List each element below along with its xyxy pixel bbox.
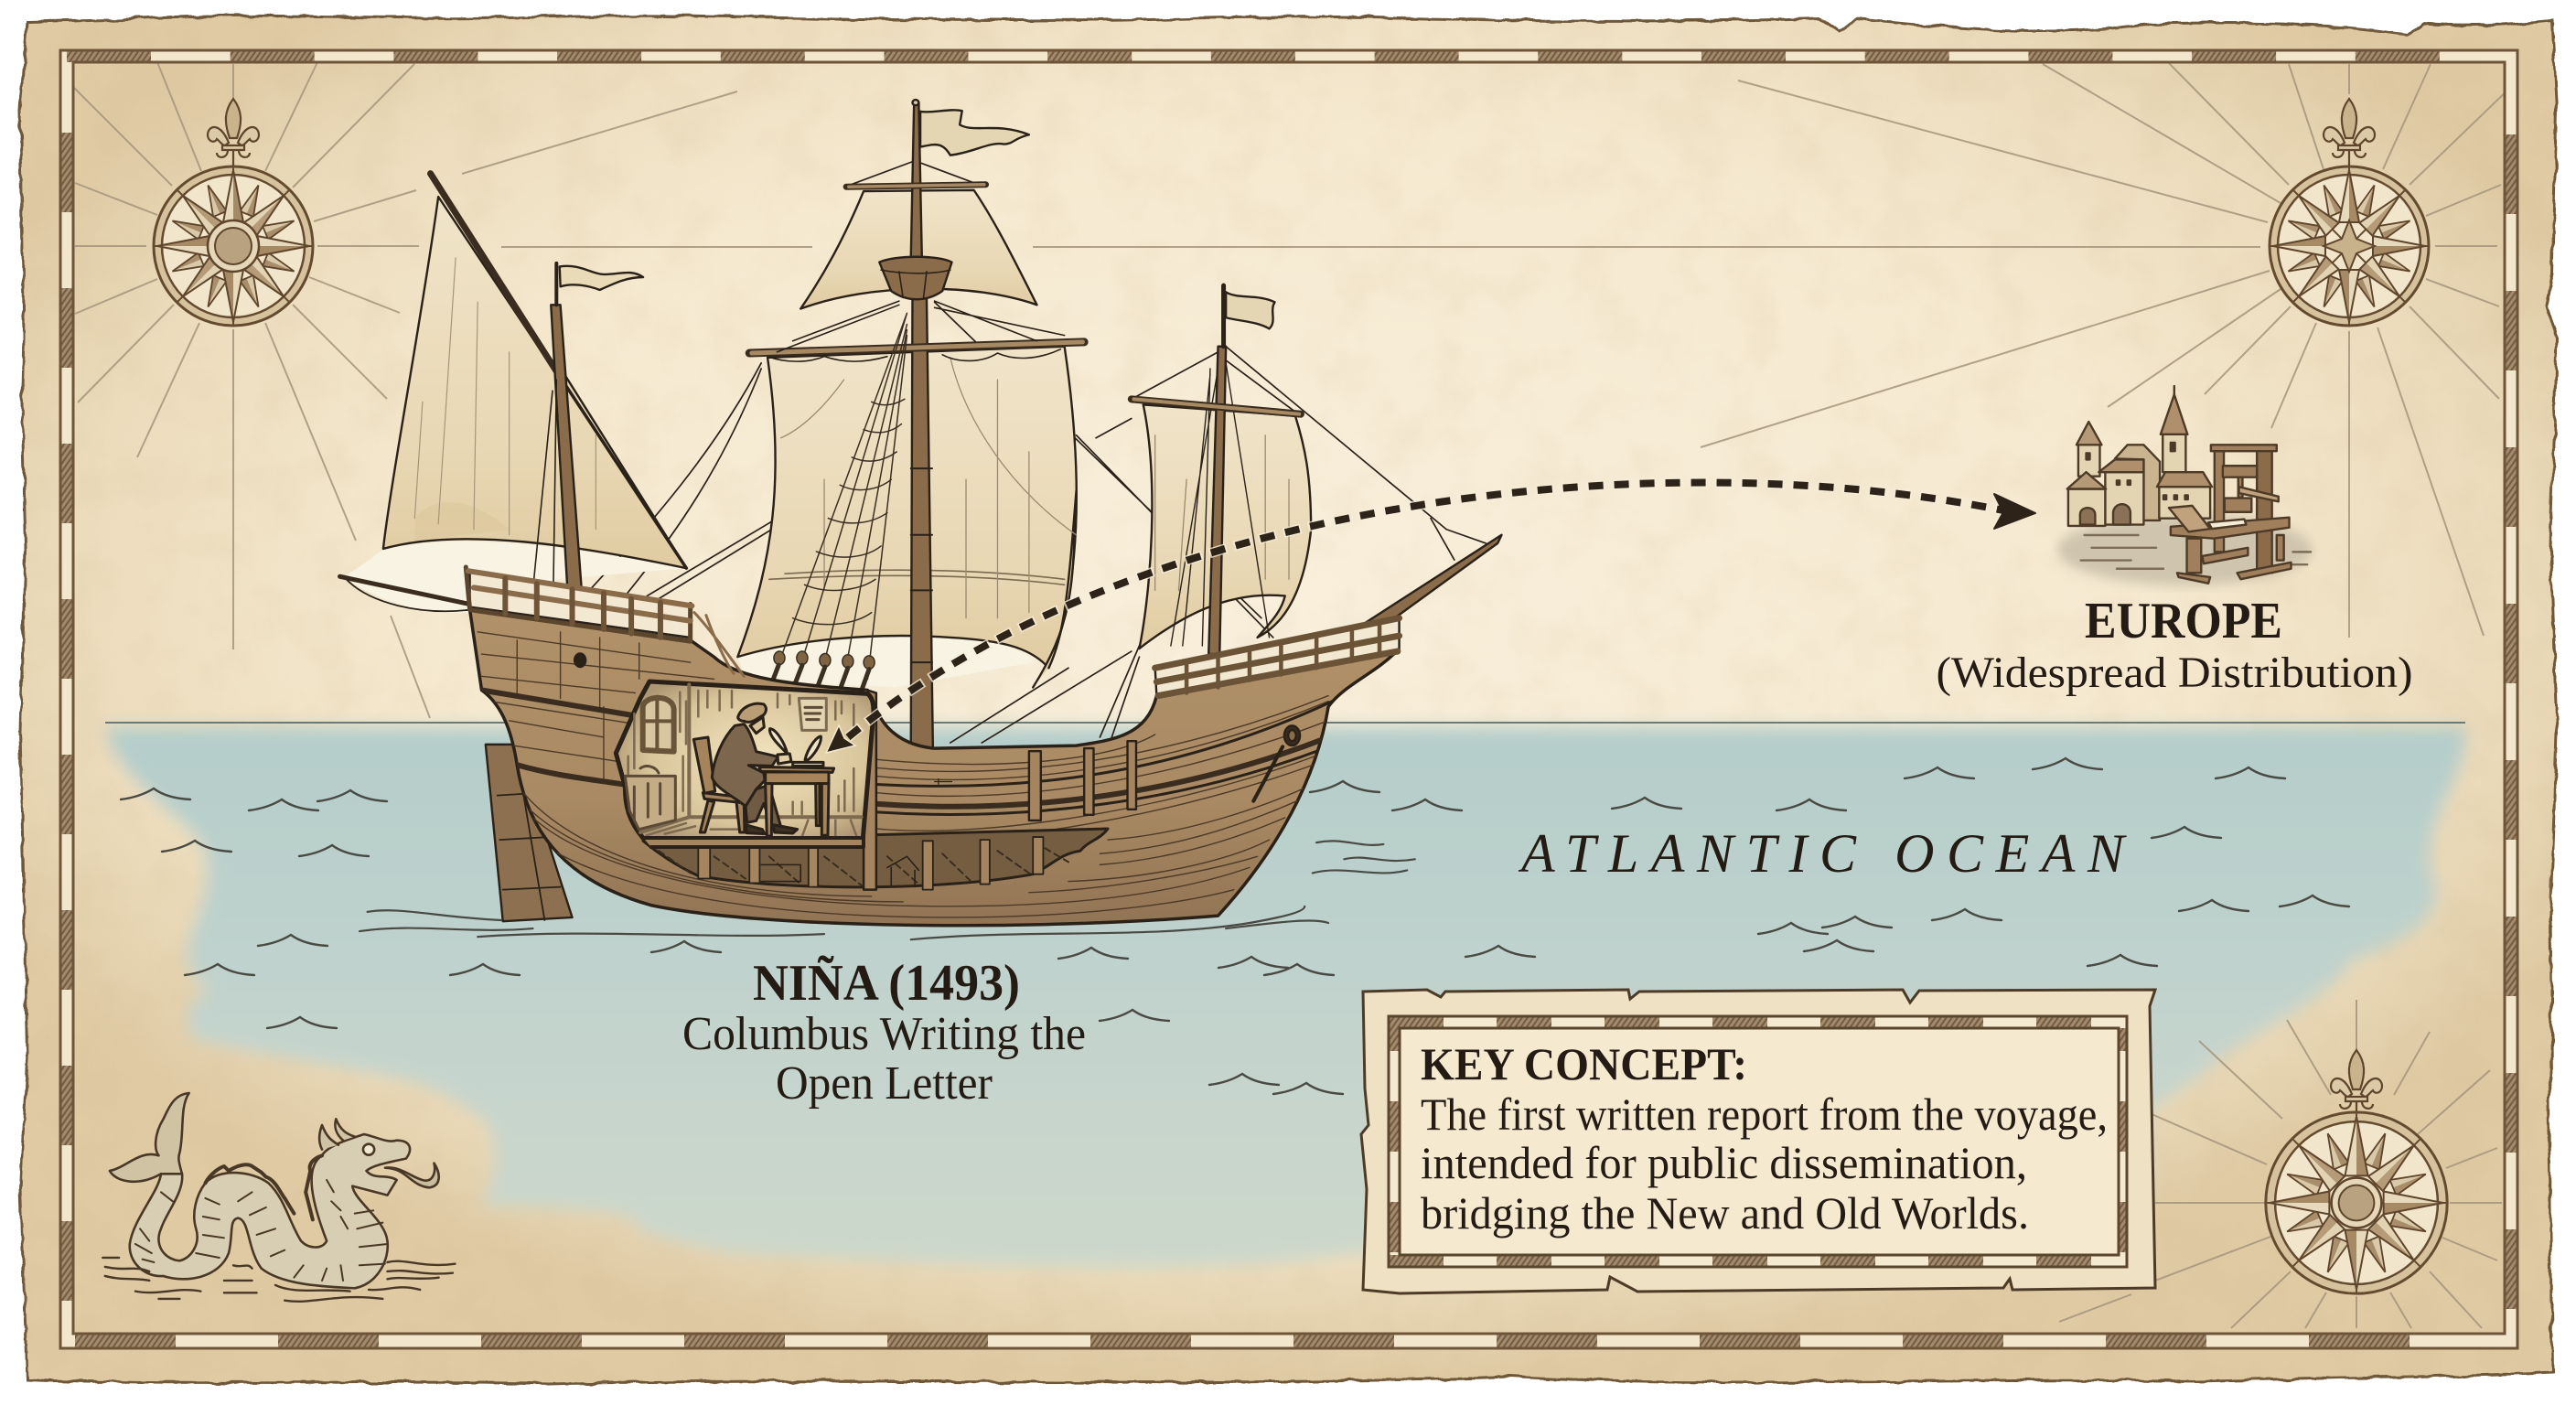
torn paper panel [1361, 990, 2155, 1293]
label: Niña [682, 955, 1086, 1110]
dotted arrow to Europe [826, 483, 2035, 753]
window [643, 698, 674, 752]
bowsprit [1360, 535, 1502, 632]
wall and floor [628, 684, 862, 837]
cabin cross-section: Columbus writing [616, 681, 874, 847]
cabinet [625, 776, 675, 830]
vertical bulkhead post [864, 689, 876, 890]
lower hold cutaway [643, 829, 1108, 890]
label: Atlantic Ocean: ATLANTIC OCEAN [1518, 823, 2127, 884]
key concept text: bridging the New and Old Worlds. [1421, 1187, 2029, 1239]
fore mast and flag [1132, 285, 1301, 654]
hull [470, 610, 1398, 926]
ground strokes [2081, 535, 2311, 569]
shrouds ratlines [772, 313, 907, 689]
label: Niña: NIÑA (1493) [753, 955, 1020, 1012]
town [2067, 386, 2212, 526]
ornate box frame [1389, 1016, 2127, 1267]
mizzen mast and flag [532, 263, 643, 590]
label: Europe: (Widespread Distribution) [1936, 649, 2413, 697]
compass rose: top right [2270, 99, 2429, 326]
sea serpent [102, 1093, 455, 1302]
back rigging [592, 161, 1486, 743]
Columbus figure [712, 703, 798, 834]
sea wash [105, 722, 2465, 1268]
key concept text: intended for public dissemination, [1421, 1137, 2027, 1188]
key concept text [1421, 1038, 2108, 1239]
wake around hull [360, 841, 1415, 939]
main topsail [800, 190, 1037, 309]
compass rose: bottom right [2266, 1050, 2447, 1293]
compass rose: top left [154, 99, 313, 326]
forecastle railing [1155, 618, 1400, 696]
lateen sail [340, 174, 686, 613]
key concept box [1361, 990, 2155, 1293]
key concept text: The first written report from the voyage, [1421, 1089, 2108, 1140]
chair [693, 737, 750, 832]
label: Niña: Columbus Writing the [682, 1008, 1086, 1060]
main course sail [737, 347, 1077, 687]
label: Europe: EUROPE [2085, 593, 2282, 649]
rudder [486, 745, 573, 921]
label: Europe [1936, 593, 2413, 697]
label: Niña: Open Letter [776, 1057, 993, 1110]
printing press [2169, 445, 2291, 584]
stern castle railing [466, 567, 744, 676]
fore sail [1139, 363, 1311, 649]
Europe town and printing press [2057, 386, 2313, 585]
key concept text: KEY CONCEPT: [1421, 1038, 1747, 1089]
writing desk [759, 736, 834, 836]
sea waves [121, 758, 2349, 1094]
notice on wall [799, 698, 826, 730]
hull planking [478, 632, 1332, 917]
main mast, yards and crow's nest [749, 100, 1084, 748]
ship: Niña caravel [340, 100, 1501, 939]
stern rudder ladder lines [498, 756, 561, 920]
